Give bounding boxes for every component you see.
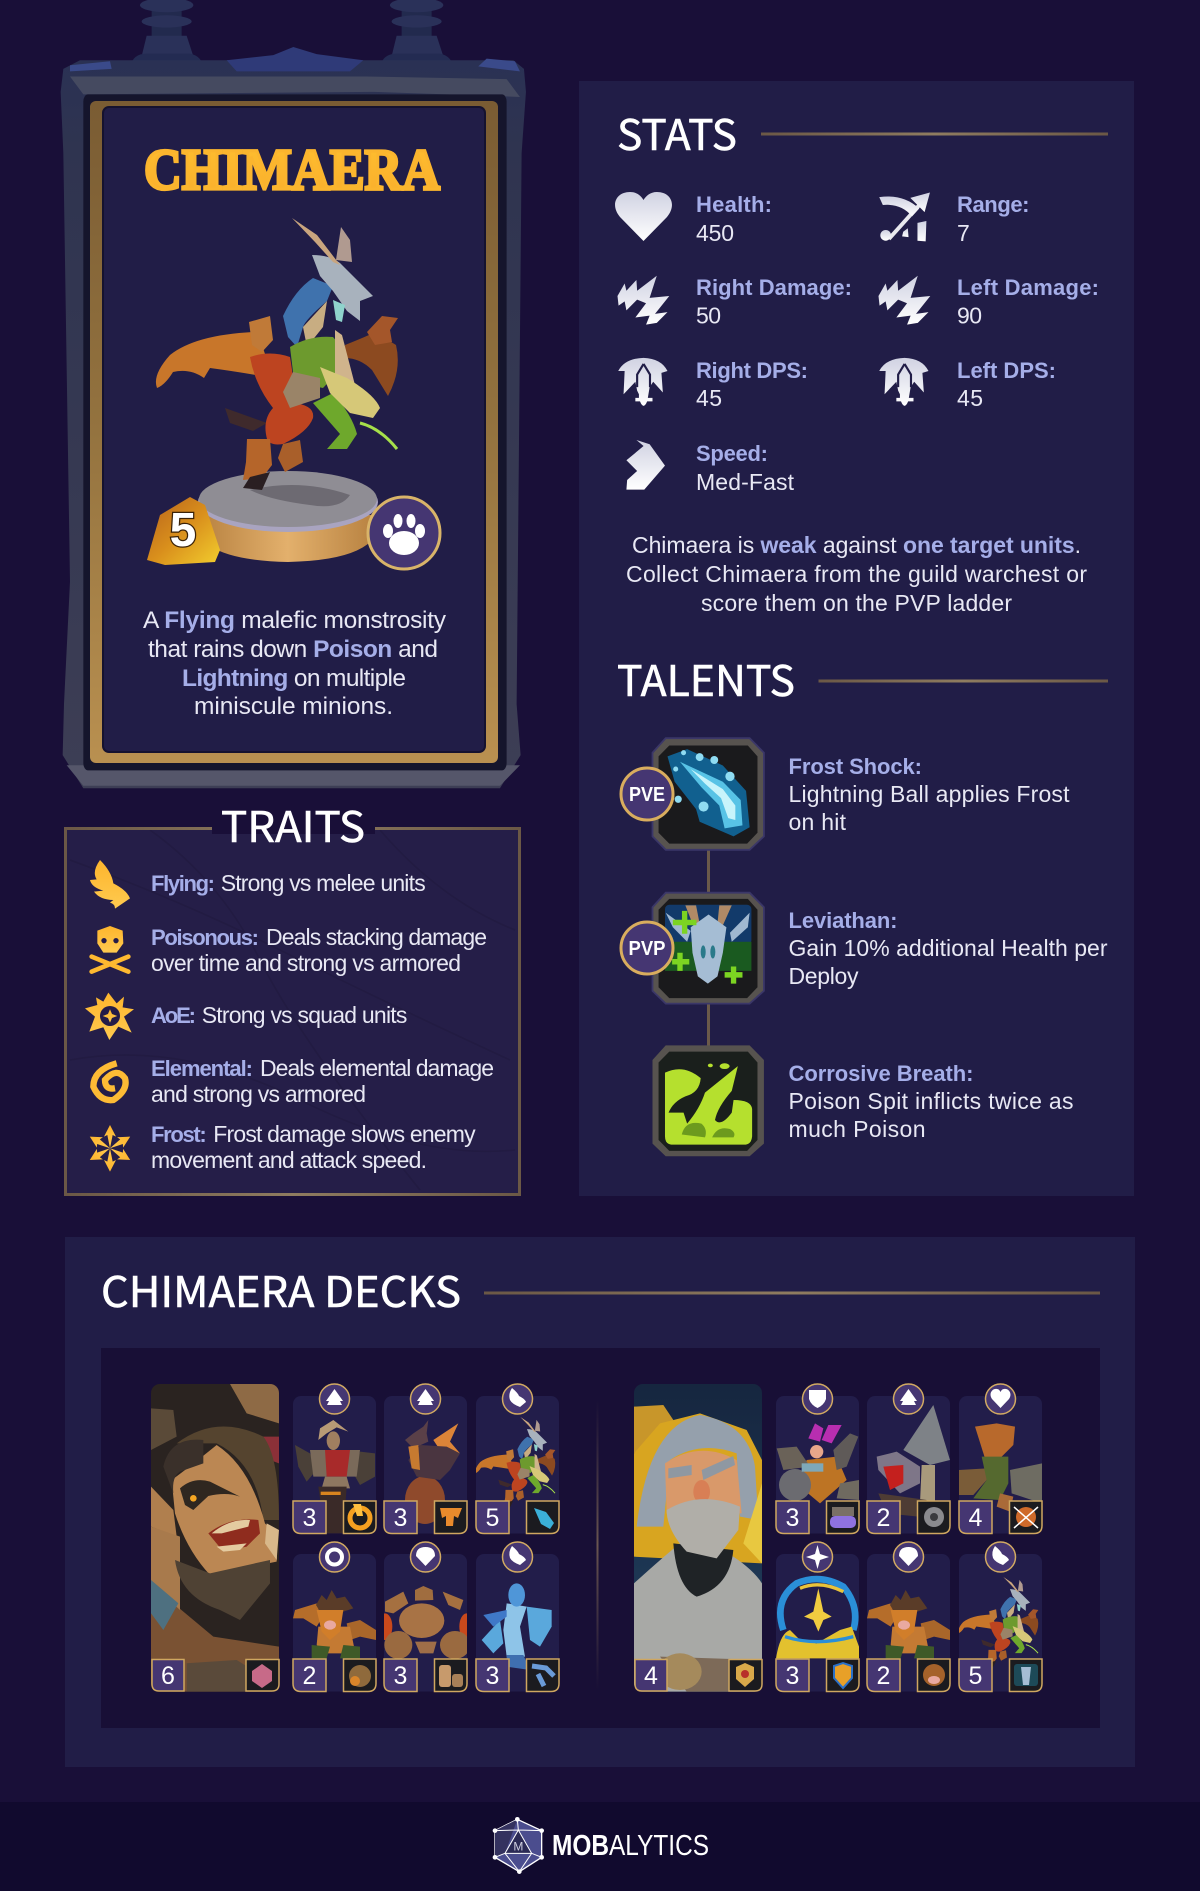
unit card 4 <box>293 1542 376 1692</box>
unit icon: tank on cloud <box>776 1384 859 1534</box>
card description: A Flying malefic monstrosity <box>143 607 447 634</box>
character card: Chimaera <box>61 0 526 788</box>
unit card 3 <box>475 1384 559 1534</box>
unit card 8 <box>867 1384 950 1534</box>
icons: stats <box>615 192 930 490</box>
text: talent descriptions: Lightning Ball applies Frost <box>788 781 1070 807</box>
unit icon: frost shock: 5 <box>486 1504 499 1532</box>
text: stats values: Right DPS: <box>696 358 808 383</box>
text: talent descriptions: Deploy <box>788 963 859 989</box>
text: trait descriptions: Frost damage slows enemy <box>213 1121 476 1147</box>
unit card 5 <box>383 1541 468 1692</box>
text: stats values: Left DPS: <box>957 358 1056 383</box>
unit icon: rock creatures: 3 <box>394 1662 407 1690</box>
text: trait descriptions <box>151 870 494 1173</box>
card description: that rains down Poison and <box>148 636 438 663</box>
text: stats values: 45 <box>696 385 722 411</box>
unit icon: claw: 3 <box>486 1662 499 1690</box>
text: trait descriptions: Flying: <box>151 871 215 896</box>
unit card 12 <box>958 1542 1042 1692</box>
text: trait descriptions: Frost: <box>151 1122 207 1147</box>
text: weakness paragraph: Collect Chimaera from the guild warchest or <box>626 561 1087 587</box>
unit icon: tank on cloud: 3 <box>786 1504 799 1532</box>
heading: decks: CHIMAERA DECKS <box>101 1259 461 1320</box>
text: trait descriptions: Strong vs melee units <box>221 870 426 896</box>
unit card 6 <box>476 1542 559 1692</box>
text: stats values: Right Damage: <box>696 275 852 300</box>
deck 2 <box>634 1384 1042 1692</box>
card description: miniscule minions. <box>194 693 393 720</box>
text: trait descriptions: Deals elemental damage <box>260 1055 494 1081</box>
text: trait descriptions: AoE: <box>151 1003 196 1028</box>
unit card 7 <box>776 1384 859 1534</box>
unit icon: warrior <box>959 1384 1042 1534</box>
unit icon: attack swirl <box>293 1384 376 1534</box>
badge: level 6 <box>152 1660 279 1691</box>
badge: level 4: 4 <box>644 1662 658 1690</box>
text: talent descriptions: on hit <box>788 809 847 835</box>
gold inner border <box>90 101 498 763</box>
text: stats values: Speed: <box>696 441 768 466</box>
text: stats values: 450 <box>696 220 734 246</box>
icon: Corrosive Breath <box>652 1045 764 1156</box>
unit icon: blue shield: 3 <box>786 1662 799 1690</box>
text: weakness paragraph: score them on the PVP ladder <box>701 590 1012 616</box>
unit icon: fire: 3 <box>394 1504 407 1532</box>
unit icon: rock creatures <box>384 1542 467 1692</box>
text: stats values: 45 <box>957 385 983 411</box>
portrait: ogre leader <box>151 1384 279 1692</box>
deck 1 <box>151 1384 559 1692</box>
divider <box>596 1400 598 1690</box>
unit icon: blue shield <box>776 1542 859 1692</box>
badge: level 6: 6 <box>161 1662 175 1690</box>
badge: PVE: PVE <box>629 784 665 806</box>
text: stats values: Health: <box>696 192 772 217</box>
panel: decks <box>65 1237 1135 1767</box>
panel: stats and talents <box>579 81 1134 1196</box>
footer band <box>0 1802 1200 1891</box>
portrait: paladin leader <box>634 1384 762 1692</box>
text: trait descriptions: movement and attack speed. <box>151 1147 427 1173</box>
text: stats values: Range: <box>957 192 1030 217</box>
unit card 9 <box>959 1384 1042 1534</box>
card description: Lightning on multiple <box>182 665 406 692</box>
unit icon: boar face <box>867 1542 950 1692</box>
text: trait descriptions: and strong vs armored <box>151 1081 366 1107</box>
icon: Mobalytics d20: M <box>513 1840 523 1854</box>
text: talent descriptions: Gain 10% additional Health per <box>788 935 1108 961</box>
unit icon: grey blades: 2 <box>877 1504 890 1532</box>
badge: cost 5 <box>147 497 220 565</box>
icon: hanging bolts and metal frame <box>61 0 526 788</box>
heading: traits: TRAITS <box>221 794 365 855</box>
unit icon: shell <box>293 1542 376 1692</box>
badge: PVP <box>621 922 673 974</box>
footer logo <box>493 1817 709 1874</box>
text: stats values: Med-Fast <box>696 469 795 495</box>
card inner panel <box>103 107 485 752</box>
card description <box>143 607 447 720</box>
text: trait descriptions: Deals stacking damage <box>266 924 487 950</box>
wordmark: MOBALYTICS <box>552 1830 709 1862</box>
text: stats values: 90 <box>957 302 982 328</box>
unit icon: shell: 2 <box>303 1662 316 1690</box>
unit icon: boar face: 2 <box>877 1662 890 1690</box>
text: stats values: 50 <box>696 302 721 328</box>
text: talent descriptions: Corrosive Breath: <box>788 1061 974 1086</box>
inner deck area <box>101 1348 1100 1728</box>
unit icon: grey blades <box>867 1384 950 1534</box>
icon: Leviathan <box>652 893 764 1004</box>
text: stats values: 7 <box>957 220 970 246</box>
unit icon: leviathan: 5 <box>969 1662 982 1690</box>
icon: paw badge <box>368 497 440 569</box>
connectors <box>707 850 710 1046</box>
badge: PVP: PVP <box>628 938 666 960</box>
badge: level 4 <box>635 1660 762 1691</box>
text: trait descriptions: Elemental: <box>151 1056 253 1081</box>
text: trait descriptions: Poisonous: <box>151 925 259 950</box>
heading: stats: STATS <box>617 102 737 163</box>
badge: cost 5: 5 <box>170 504 196 557</box>
unit card 11 <box>867 1542 950 1692</box>
icons: traits <box>85 860 134 1172</box>
pedestal <box>195 471 380 562</box>
icon: Frost Shock <box>652 738 764 850</box>
panel: traits <box>66 794 520 1194</box>
text: weakness paragraph <box>626 532 1087 616</box>
text: trait descriptions: over time and strong vs armored <box>151 950 461 976</box>
unit card 2 <box>384 1384 467 1534</box>
unit icon: claw <box>476 1542 559 1692</box>
heading: talents: TALENTS <box>617 648 795 709</box>
unit card 1 <box>293 1384 376 1534</box>
text: talent descriptions: Frost Shock: <box>788 754 922 779</box>
text: talent descriptions: much Poison <box>788 1116 926 1142</box>
unit icon: warrior: 4 <box>969 1504 983 1532</box>
text: talent descriptions: Poison Spit inflicts twice as <box>788 1088 1074 1114</box>
text: weakness paragraph: Chimaera is weak against one target units. <box>632 532 1081 558</box>
text: talent descriptions <box>788 754 1108 1142</box>
text: stats values: Left Damage: <box>957 275 1099 300</box>
card title: CHIMAERA <box>144 137 440 202</box>
unit card 10 <box>776 1542 859 1692</box>
unit icon: attack swirl: 3 <box>303 1504 316 1532</box>
unit icon: frost shock <box>476 1384 559 1534</box>
unit icon: leviathan <box>959 1542 1042 1692</box>
icon: Mobalytics d20 <box>493 1817 544 1874</box>
text: talent descriptions: Leviathan: <box>788 908 898 933</box>
illustration: Chimaera dragon <box>156 218 398 490</box>
badge: PVE <box>621 768 673 820</box>
text: stats values <box>696 192 1099 495</box>
text: trait descriptions: Strong vs squad units <box>202 1002 407 1028</box>
unit icon: fire <box>384 1384 467 1534</box>
